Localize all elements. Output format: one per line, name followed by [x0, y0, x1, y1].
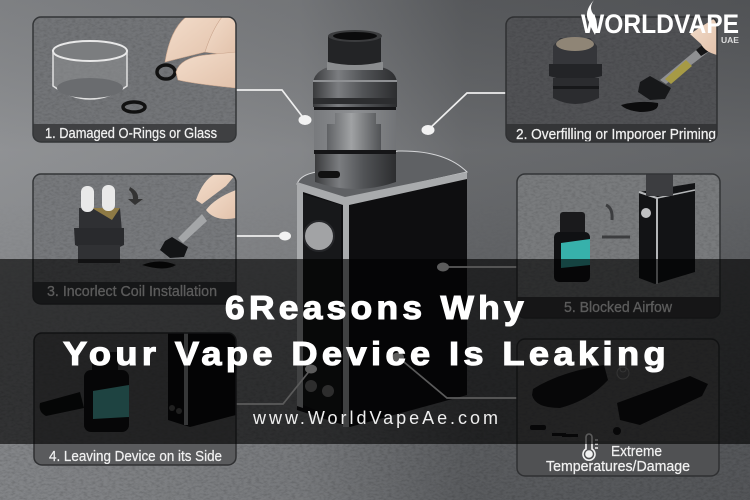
panel 2 border [506, 17, 717, 142]
held o-ring [157, 65, 175, 79]
label: Extreme [611, 443, 662, 460]
logo flame [587, 0, 597, 35]
coil head [74, 208, 124, 263]
leak puddle [621, 102, 658, 112]
arrows [602, 205, 630, 237]
panel 4 border [34, 333, 236, 465]
label: 4. Leaving Device on its Side [49, 448, 222, 465]
panel 3: incorrect coil installation [33, 174, 236, 304]
device body [297, 174, 467, 427]
vape device [297, 30, 467, 427]
panel 5 border [517, 174, 720, 318]
panel 6 border [517, 339, 719, 476]
bottle [554, 212, 590, 282]
coil head [549, 37, 602, 104]
bottle [84, 352, 129, 432]
label strip [517, 441, 719, 476]
dark title band [0, 259, 750, 444]
arrow [128, 187, 143, 205]
callout dots [279, 115, 449, 374]
dropper [178, 214, 207, 243]
title line 2: Your Vape Device Is Leaking [63, 335, 670, 372]
label strip [33, 124, 236, 142]
device metal frame [297, 172, 467, 427]
faint thermometer [617, 350, 629, 379]
label: 3. Incorlect Coil Installation [47, 283, 217, 300]
logo [581, 0, 739, 45]
panel 2: overfilling [506, 17, 717, 143]
panel 1: damaged o-rings or glass [33, 17, 236, 142]
tank collar [313, 66, 397, 107]
label strip [506, 124, 717, 142]
device on side [168, 333, 236, 427]
o-ring on table [123, 102, 145, 112]
tank base [315, 152, 396, 189]
device body top plate [297, 151, 467, 199]
second device half [617, 376, 708, 425]
broken device half [532, 365, 608, 408]
small debris [530, 425, 621, 437]
logo wordmark: WORLDVAPE [581, 9, 739, 39]
puddle [142, 262, 176, 268]
mini device [639, 174, 695, 284]
thermometer icon [583, 434, 598, 460]
fingers [165, 17, 236, 88]
title line 1: 6Reasons Why [225, 289, 528, 326]
fingers [196, 174, 236, 219]
panel 3 border [33, 174, 236, 304]
adjust buttons [305, 380, 334, 397]
inner coil [327, 113, 381, 150]
dropper tip [40, 392, 84, 416]
logo subtext: UAE [721, 35, 739, 45]
cotton wicks [81, 185, 115, 212]
label: 5. Blocked Airfow [564, 299, 672, 316]
label: 2. Overfilling or Imporoer Priming [516, 126, 716, 143]
label strip [34, 444, 236, 465]
label line 2: Temperatures/Damage [546, 458, 690, 475]
panel 6: extreme temperatures [518, 352, 708, 475]
fingers [690, 17, 717, 55]
fire button [304, 221, 334, 251]
panel 4: leaving device on side [34, 333, 236, 465]
drip tip [328, 36, 381, 65]
label: 1. Damaged O-Rings or Glass [45, 125, 217, 142]
dropper [660, 50, 708, 84]
glass tube [53, 41, 127, 99]
panel 1 border [33, 17, 236, 142]
title [63, 289, 670, 372]
label strip [33, 282, 236, 304]
small part [160, 237, 188, 258]
website url: www.WorldVapeAe.com [252, 408, 498, 428]
callout lines [236, 90, 517, 404]
tank glass [314, 109, 396, 152]
collar ring [327, 62, 383, 70]
small part [638, 76, 671, 100]
panel 5: blocked airflow [517, 174, 720, 318]
label strip [517, 297, 720, 318]
device side panel [303, 194, 341, 420]
